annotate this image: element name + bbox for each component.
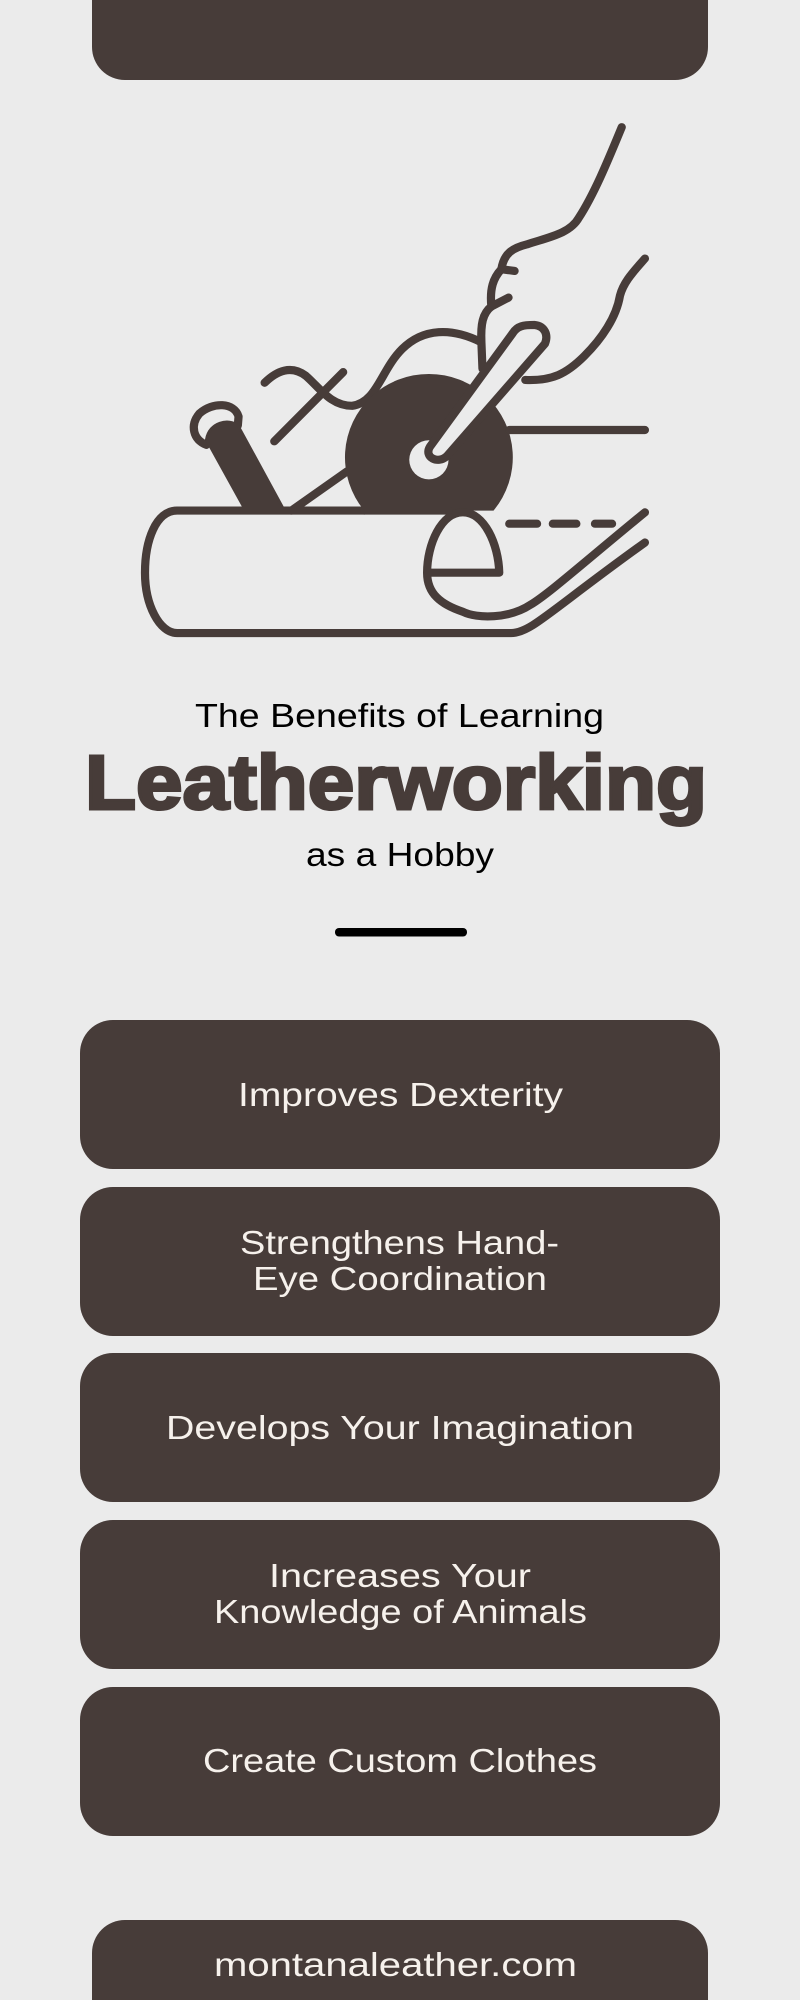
footer panel with website [92,1920,708,2000]
title line 1: The Benefits of Learning [195,697,604,734]
panel: improves dexterity [80,1020,720,1169]
icon: tool handle and ring [194,405,284,511]
icon: hand and arm outline [481,127,645,430]
icon: roll top edge [364,499,449,522]
panel: knowledge of animals: Knowledge of Animals [214,1593,587,1630]
illustration: hand cutting leather with a swivel knife [145,127,645,633]
panel: imagination: Develops Your Imagination [166,1409,634,1446]
panel: imagination [80,1353,720,1502]
icon: leather roll [145,511,645,633]
icon: stitch dashes [509,512,612,535]
top banner panel [92,0,708,80]
panel: hand-eye coordination: Strengthens Hand- [240,1224,559,1261]
icon: cutting disk [345,374,513,511]
panel: custom clothes: Create Custom Clothes [203,1742,597,1779]
footer panel with website: montanaleather.com [214,1946,577,1983]
icon: knife handle [428,325,546,460]
panel: improves dexterity: Improves Dexterity [238,1076,564,1113]
panel: hand-eye coordination: Eye Coordination [253,1260,547,1297]
panel: hand-eye coordination [80,1187,720,1336]
icon: disk centre hole [409,440,449,479]
title divider bar [335,928,467,936]
icon: leather fold and edge [427,512,645,616]
title main word: Leatherworking [85,740,707,826]
icon: thread and cross stitch [265,332,481,511]
panel: custom clothes [80,1687,720,1836]
panel: knowledge of animals [80,1520,720,1669]
panel: knowledge of animals: Increases Your [269,1557,531,1594]
title line 3: as a Hobby [306,836,495,873]
